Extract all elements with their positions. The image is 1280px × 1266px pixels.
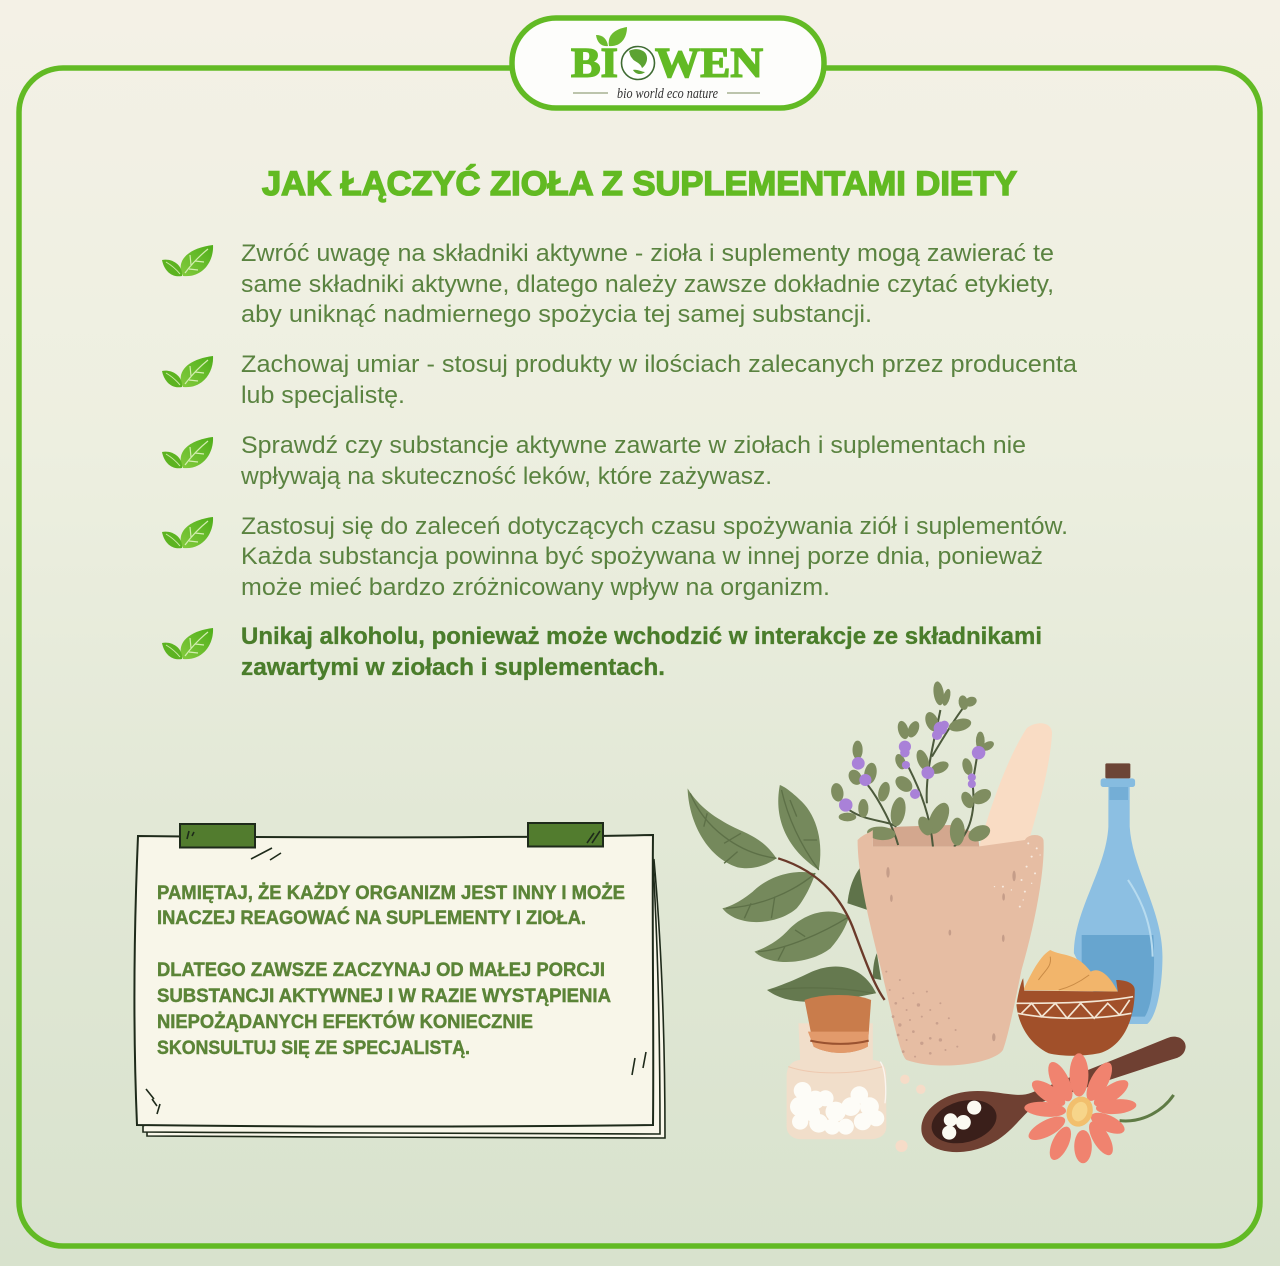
icon: pestle xyxy=(979,723,1052,847)
tip 3 text xyxy=(240,432,1026,490)
tip 4 text xyxy=(241,513,1068,601)
tip 1 text: Zwróć uwagę na składniki aktywne - zioła i suplementy mogą zawierać te xyxy=(241,240,1054,267)
tip 4 text: może mieć bardzo zróżnicowany wpływ na organizm. xyxy=(241,574,830,601)
tip 2 text: Zachowaj umiar - stosuj produkty w ilościach zalecanych przez producenta xyxy=(241,351,1078,378)
mortar highlights xyxy=(994,842,1041,908)
tip 5 bold text xyxy=(241,623,1042,681)
logo globe xyxy=(622,46,654,80)
icon: leaves xyxy=(162,356,213,387)
note text xyxy=(157,883,625,1059)
note text: INACZEJ REAGOWAĆ NA SUPLEMENTY I ZIOŁA. xyxy=(157,907,586,929)
paper front sheet xyxy=(134,835,653,1126)
tip 1 xyxy=(162,240,1054,328)
tip 1 text: aby uniknąć nadmiernego spożycia tej samej substancji. xyxy=(241,301,872,328)
tip 2 xyxy=(162,351,1078,409)
tip 4 xyxy=(162,513,1068,601)
title: JAK ŁĄCZYĆ ZIOŁA Z SUPLEMENTAMI DIETY xyxy=(262,165,1017,203)
tip 3 text: wpływają na skuteczność leków, które zażywasz. xyxy=(240,463,772,490)
note text: PAMIĘTAJ, ŻE KAŻDY ORGANIZM JEST INNY I MOŻE xyxy=(157,883,625,904)
icon: flower xyxy=(1024,1053,1174,1163)
tip 4 text: Każda substancja powinna być spożywana w innej porze dnia, ponieważ xyxy=(241,543,1043,570)
icon: leaves xyxy=(162,517,213,548)
tip 5 bold text: Unikaj alkoholu, ponieważ może wchodzić w interakcje ze składnikami xyxy=(241,623,1042,650)
note text: NIEPOŻĄDANYCH EFEKTÓW KONIECZNIE xyxy=(157,1011,533,1033)
sketch marks xyxy=(146,831,646,1114)
note text: SUBSTANCJI AKTYWNEJ I W RAZIE WYSTĄPIENIA xyxy=(157,986,611,1007)
logo badge xyxy=(512,18,824,108)
tip 5 xyxy=(162,623,1042,681)
paper stack xyxy=(143,845,665,1138)
icon: leaves xyxy=(162,245,213,276)
tip 2 text xyxy=(241,351,1078,409)
tip 3 text: Sprawdź czy substancje aktywne zawarte w ziołach i suplementach nie xyxy=(241,432,1026,459)
tip 1 text xyxy=(241,240,1054,328)
icon: oil bottle xyxy=(1074,763,1162,1024)
logo leaves xyxy=(596,27,627,46)
logo wordmark BI: BI xyxy=(571,41,618,87)
note text: DLATEGO ZAWSZE ZACZYNAJ OD MAŁEJ PORCJI xyxy=(157,960,605,981)
icon: mortar xyxy=(858,830,1044,1066)
icon: leaf branch xyxy=(688,785,881,1002)
icon: pill jar xyxy=(787,995,926,1152)
icon: leaves xyxy=(162,437,213,468)
icon: leaves xyxy=(162,628,213,659)
tip 3 xyxy=(162,432,1026,490)
mortar speckles xyxy=(885,971,958,1058)
tip 2 text: lub specjalistę. xyxy=(241,382,405,409)
tape right xyxy=(528,823,603,846)
icon: powder bowl xyxy=(1016,950,1135,1056)
stem over mortar xyxy=(778,858,885,1000)
panel: note card xyxy=(134,823,665,1138)
tip 5 bold text: zawartymi w ziołach i suplementach. xyxy=(241,654,665,681)
tape left xyxy=(180,824,255,848)
tip 4 text: Zastosuj się do zaleceń dotyczących czasu spożywania ziół i suplementów. xyxy=(241,513,1068,540)
icon: herb sprigs xyxy=(830,681,996,847)
icon: wooden spoon xyxy=(921,1037,1186,1152)
logo wordmark WEN: WEN xyxy=(655,41,763,87)
illustration: herbs, mortar, bottle, spoon xyxy=(688,681,1186,1163)
logo tagline: bio world eco nature xyxy=(617,86,718,102)
note text: SKONSULTUJ SIĘ ZE SPECJALISTĄ. xyxy=(157,1038,470,1059)
tip 1 text: same składniki aktywne, dlatego należy zawsze dokładnie czytać etykiety, xyxy=(241,271,1054,298)
